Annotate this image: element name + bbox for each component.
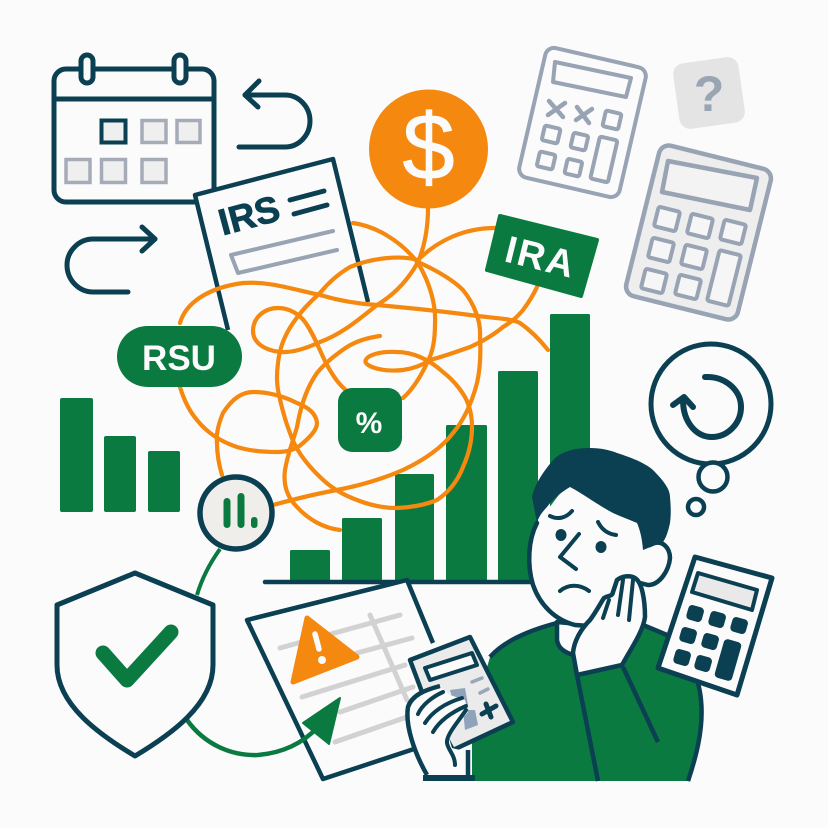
icon: grey calculator small [517,46,648,199]
icon: question mark tile: ? [694,66,724,122]
hand holding calculator [407,686,475,781]
tag: RSU: RSU [142,339,216,378]
shield arc connector and arrow [187,698,340,755]
face [529,480,660,625]
tag: percent [338,388,402,452]
eyes [556,529,606,553]
tangled orange lines [180,208,548,530]
icon: shield with check [57,573,213,756]
tag: IRA [487,216,597,296]
bar chart: rising bars [265,314,590,582]
icon: question mark tile [672,56,746,130]
facial features [550,511,616,591]
icon: grey calculator large [624,143,773,322]
person: worried man [472,448,702,781]
icon: calendar [54,55,214,202]
table lines [280,615,413,742]
bar chart: small left bars [60,398,180,512]
document form field [231,231,337,273]
icon: dark calculator [658,557,772,695]
tag: percent: % [356,407,382,440]
arrow: return arrow bottom [67,227,155,292]
connector: green line to chart badge [197,549,220,595]
document text lines [290,191,327,214]
panel: alert document [247,580,433,779]
arrow: return arrow top [239,81,310,147]
icon: dollar coin: $ [402,94,455,199]
hand on cheek [573,576,645,675]
green sweater [472,623,702,781]
icon: warning triangle [293,618,357,682]
ear [640,543,670,585]
tag: IRA: IRA [501,229,580,287]
IRS label: IRS [214,188,284,243]
icon: handheld calculator [410,637,513,750]
neck [557,622,590,655]
panel: IRS document [195,159,368,330]
icon: dollar coin [369,90,488,208]
thought bubble with refresh arrow [651,344,771,515]
face outline [529,523,590,626]
tag: RSU [117,326,242,387]
icon: chart badge [200,477,272,549]
hair [532,448,671,550]
